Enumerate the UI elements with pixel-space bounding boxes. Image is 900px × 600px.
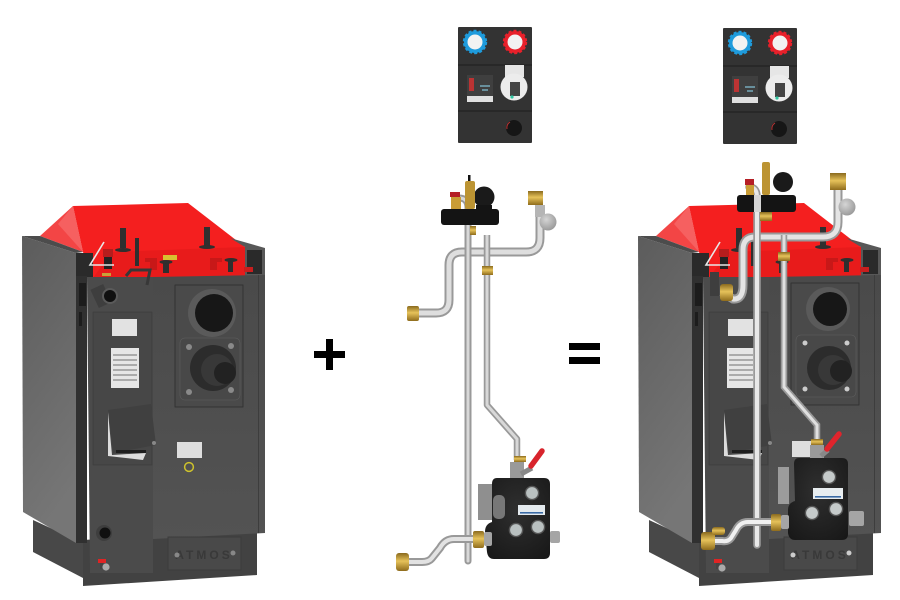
pump control unit: centre bbox=[458, 27, 532, 143]
front column bbox=[703, 277, 769, 573]
white pump bbox=[766, 66, 792, 102]
atmos plate: ATMOS bbox=[175, 548, 233, 562]
drain valve bbox=[98, 559, 110, 571]
control box bbox=[709, 312, 768, 465]
dark hinge strip bbox=[76, 276, 87, 543]
second riser bbox=[487, 235, 517, 460]
flue plate bbox=[175, 285, 243, 407]
pump side fittings bbox=[484, 531, 560, 546]
pump housing box bbox=[478, 484, 492, 520]
pipe kit: installed on right boiler bbox=[701, 162, 864, 550]
hex plug bbox=[540, 214, 556, 230]
insulated pump group bbox=[788, 458, 848, 540]
insulation panel bbox=[458, 27, 532, 143]
insulation panel bbox=[723, 28, 797, 144]
manifold bbox=[441, 186, 499, 225]
safety valve bbox=[450, 192, 461, 209]
sticker bbox=[732, 76, 758, 103]
door label bbox=[792, 441, 817, 457]
long vertical pipe bbox=[459, 198, 468, 561]
boiler skirt bbox=[33, 520, 83, 578]
warning sticker bbox=[163, 255, 177, 260]
main horizontal pipe bbox=[722, 190, 838, 299]
main horizontal pipe bbox=[413, 213, 540, 313]
hex plug bbox=[838, 198, 856, 216]
burner plate bbox=[180, 338, 240, 400]
flue outlet bbox=[806, 287, 850, 331]
lower door bbox=[153, 275, 265, 539]
flap bbox=[724, 404, 772, 460]
sticker bbox=[467, 75, 493, 102]
dark hinge strip bbox=[692, 276, 703, 543]
white pump bbox=[500, 65, 528, 100]
top fittings bbox=[102, 227, 238, 285]
hex key bbox=[706, 242, 730, 265]
pump side fittings bbox=[781, 511, 864, 529]
lower door bbox=[769, 275, 881, 539]
upper socket bbox=[90, 284, 118, 308]
equals sign bbox=[569, 343, 600, 364]
vent valve bbox=[465, 175, 475, 209]
flue outlet bbox=[188, 289, 236, 337]
second riser bbox=[784, 235, 817, 445]
atmos plate bbox=[784, 537, 857, 570]
flap bbox=[108, 404, 156, 460]
boiler: right bbox=[638, 203, 881, 586]
lower socket bbox=[96, 525, 112, 541]
red dial bbox=[769, 32, 791, 54]
pump housing box bbox=[778, 467, 789, 504]
knob bbox=[506, 120, 522, 136]
right rear corner bbox=[846, 238, 881, 276]
vent valve bbox=[762, 162, 770, 195]
rating label top bbox=[728, 319, 753, 336]
safety valve bbox=[745, 179, 754, 195]
rating label main bbox=[111, 348, 139, 388]
door label bbox=[177, 442, 202, 458]
plus sign bbox=[314, 339, 345, 370]
manifold bbox=[737, 172, 796, 212]
boiler side panel bbox=[22, 236, 76, 543]
red dial bbox=[504, 31, 526, 53]
pump control unit: right bbox=[723, 28, 797, 144]
left dark notch bbox=[76, 253, 93, 278]
long vertical pipe bbox=[749, 187, 757, 545]
drain valve bbox=[714, 559, 726, 572]
front column bbox=[87, 277, 153, 573]
red hood bbox=[22, 203, 245, 278]
flue plate bbox=[791, 283, 859, 405]
red hood bbox=[638, 203, 861, 278]
rating label main bbox=[727, 348, 755, 388]
boiler skirt bbox=[649, 520, 699, 578]
brass fittings bbox=[396, 191, 543, 571]
insulated pump group bbox=[485, 478, 550, 559]
knob bbox=[771, 121, 787, 137]
left dark notch bbox=[692, 253, 709, 278]
boiler base bbox=[83, 530, 257, 586]
blue dial bbox=[464, 31, 486, 53]
ball valve bbox=[510, 451, 542, 479]
atmos plate: ATMOS bbox=[791, 548, 849, 562]
burner plate bbox=[796, 335, 856, 397]
brass fittings bbox=[701, 173, 846, 550]
lower inlet pipe bbox=[702, 522, 790, 541]
lower inlet pipe bbox=[400, 539, 482, 562]
top fittings bbox=[719, 227, 854, 273]
right rear corner bbox=[230, 238, 265, 276]
upper socket bbox=[710, 272, 719, 296]
yellow hook bbox=[185, 463, 193, 471]
upper right pipe stub bbox=[535, 205, 545, 217]
boiler: left bbox=[22, 203, 265, 586]
boiler side panel bbox=[638, 236, 692, 543]
blue dial bbox=[729, 32, 751, 54]
control box bbox=[93, 312, 152, 465]
atmos plate bbox=[168, 537, 241, 570]
ball valve bbox=[810, 434, 839, 461]
rating label top bbox=[112, 319, 137, 336]
boiler base bbox=[699, 530, 873, 586]
pipe kit: centre bbox=[396, 175, 560, 571]
hex key bbox=[90, 242, 114, 265]
